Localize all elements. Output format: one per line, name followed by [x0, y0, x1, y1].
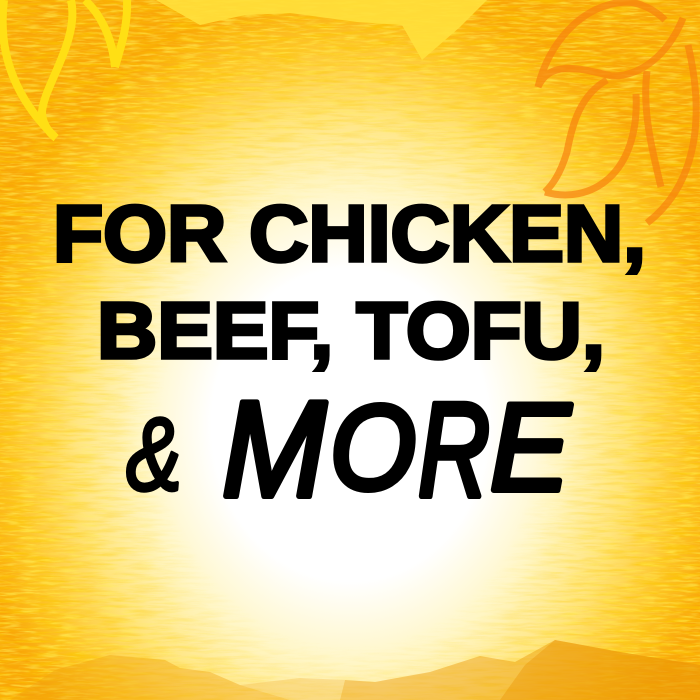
heading: brush lettering "& MORE": M: [222, 373, 327, 525]
heading: brush lettering "& MORE": E: [490, 379, 571, 517]
heading: brush lettering "& MORE": R: [418, 376, 490, 525]
heading: brush lettering "& MORE": O: [330, 381, 416, 515]
heading: first line: FOR CHICKEN,: [53, 189, 646, 278]
heading: brush lettering "& MORE": &: [126, 397, 182, 513]
icon: orange leaf outline, top right: [538, 2, 696, 223]
icon: yellow leaf outline, top left: [3, 0, 127, 138]
heading: brush lettering "& MORE": [126, 373, 571, 525]
heading: second line: BEEF, TOFU,: [97, 286, 605, 375]
mountains at bottom: [10, 640, 700, 700]
torn paper edge at top: [156, 0, 487, 60]
